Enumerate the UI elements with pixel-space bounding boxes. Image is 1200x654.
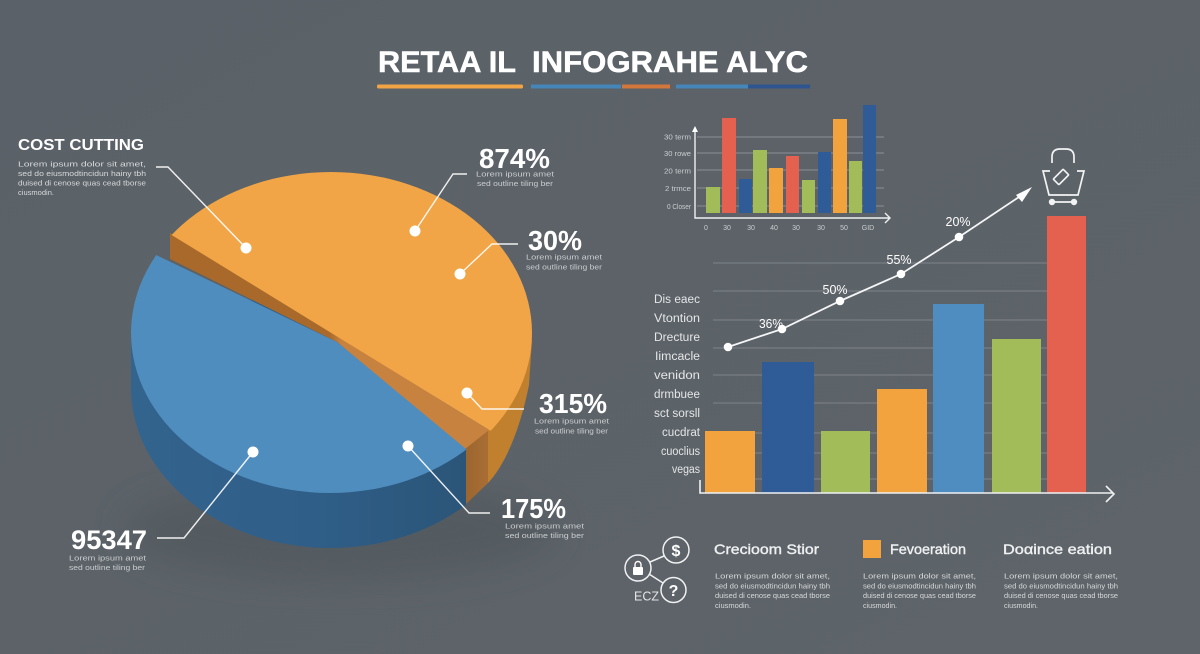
large bar chart: sct sorsll xyxy=(654,408,700,420)
trend line arrow: 55% xyxy=(886,252,912,267)
callout: 30%: Lorem ipsum amet xyxy=(526,254,602,262)
text block: fevoeration: ciusmodin. xyxy=(863,601,897,610)
large bar chart xyxy=(654,216,1114,502)
trend line arrow: 20% xyxy=(946,214,971,229)
text block: docince eation: Lorem ipsum dolor sit amet, xyxy=(1004,572,1118,580)
callout: cost cutting: duised di cenose quas cead tborse xyxy=(18,178,146,188)
callout: 95347: sed outline tiling ber xyxy=(69,565,146,572)
callout: 315%: sed outline tiling ber xyxy=(535,428,609,436)
text block: crecioom stior: Crecioom Stior xyxy=(714,541,819,557)
callout: 315% xyxy=(462,388,609,436)
title: RETAA IL xyxy=(378,46,516,79)
callout: 874%: sed outline tiling ber xyxy=(477,181,554,188)
small bar chart: 30 xyxy=(723,225,731,232)
callout: 175% xyxy=(402,440,585,540)
callout: 95347 xyxy=(69,446,258,572)
small bar chart: GID xyxy=(862,225,874,232)
large bar chart: vegas xyxy=(672,464,700,476)
small bar chart: 2 trmce xyxy=(665,186,691,193)
text block: fevoeration: duised di cenose quas cead tborse xyxy=(863,591,976,600)
large bar chart: cucdrat xyxy=(662,427,701,439)
large bar chart: Drecture xyxy=(654,332,700,344)
callout: 315%: 315% xyxy=(539,388,607,419)
text block: crecioom stior: sed do eiusmodtincidun hainy tbh xyxy=(715,582,830,590)
callout: 30%: sed outline tiling ber xyxy=(526,264,603,272)
title: INFOGRAHE ALYC xyxy=(532,46,808,79)
trend line arrow xyxy=(724,187,1032,351)
callout: 315%: Lorem ipsum amet xyxy=(534,418,609,426)
small bar chart: 50 xyxy=(840,225,848,232)
callout: 874%: Lorem ipsum amet xyxy=(476,172,554,178)
trend line arrow: 50% xyxy=(822,282,848,297)
large bar chart: venidon xyxy=(654,370,700,382)
text block: fevoeration: Lorem ipsum dolor sit amet, xyxy=(863,572,976,580)
icon: finance network: ECZ xyxy=(634,588,659,604)
small bar chart: 30 xyxy=(792,225,800,232)
pie slice: blue xyxy=(131,255,466,493)
callout: 874%: 874% xyxy=(479,143,550,174)
text block: docince eation: duised di cenose quas cead tborse xyxy=(1004,591,1118,600)
text block: crecioom stior: Lorem ipsum dolor sit amet, xyxy=(715,572,830,580)
small bar chart xyxy=(664,105,890,232)
callout: 95347: 95347 xyxy=(71,525,147,555)
icon: finance network xyxy=(625,537,689,604)
small bar chart: 0 Closer xyxy=(667,204,692,211)
small bar chart: 20 term xyxy=(664,168,691,176)
pie chart xyxy=(131,172,532,558)
text block: docince eation: Doαince eation xyxy=(1003,541,1112,557)
text block: fevoeration: Fevoeration xyxy=(890,541,966,557)
text block: crecioom stior: duised di cenose quas cead tborse xyxy=(715,591,830,600)
callout: cost cutting: ciusmodin. xyxy=(18,188,54,197)
callout: 874% xyxy=(410,143,554,236)
text block: docince eation: ciusmodin. xyxy=(1004,601,1038,610)
callout: cost cutting: sed do eiusmodtincidun hainy tbh xyxy=(18,169,146,178)
text block: fevoeration: sed do eiusmodtincidun hainy tbh xyxy=(863,582,976,590)
callout: 175%: Lorem ipsum amet xyxy=(505,524,584,530)
large bar chart: cuoclius xyxy=(661,446,700,458)
small bar chart: 0 xyxy=(704,225,708,232)
legend swatch: orange xyxy=(863,540,881,558)
trend line arrow: 36% xyxy=(759,316,783,331)
callout: cost cutting: Lorem ipsum dolor sit amet, xyxy=(18,160,146,168)
text block: crecioom stior xyxy=(714,541,830,610)
icon: finance network: $ xyxy=(672,543,681,560)
callout: cost cutting: COST CUTTING xyxy=(18,137,144,154)
icon: shopping basket xyxy=(1043,149,1084,205)
small bar chart: 40 xyxy=(770,225,778,232)
callout: 30%: 30% xyxy=(528,225,582,256)
callout: 175%: 175% xyxy=(501,493,566,524)
small bar chart: 30 xyxy=(817,225,825,232)
title underline xyxy=(377,84,810,88)
callout: 175%: sed outline tiling ber xyxy=(505,533,585,540)
text block: fevoeration xyxy=(863,541,976,610)
icon: finance network: ? xyxy=(669,583,678,600)
text block: crecioom stior: ciusmodin. xyxy=(715,601,751,610)
callout: 30% xyxy=(454,225,603,280)
callout: cost cutting xyxy=(18,137,252,254)
text block: docince eation xyxy=(1003,541,1118,610)
large bar chart: Vtontion xyxy=(654,313,700,325)
small bar chart: 30 rowe xyxy=(664,151,691,158)
text block: docince eation: sed do eiusmodtincidun hainy tbh xyxy=(1004,582,1118,590)
small bar chart: 30 term xyxy=(664,134,691,142)
large bar chart: Dis eaec xyxy=(654,294,700,306)
title xyxy=(378,46,808,79)
small bar chart: 30 xyxy=(747,225,755,232)
pie slice: orange xyxy=(172,172,532,431)
callout: 95347: Lorem ipsum amet xyxy=(69,556,146,562)
large bar chart: drmbuee xyxy=(654,389,700,401)
large bar chart: Iimcacle xyxy=(655,351,700,363)
